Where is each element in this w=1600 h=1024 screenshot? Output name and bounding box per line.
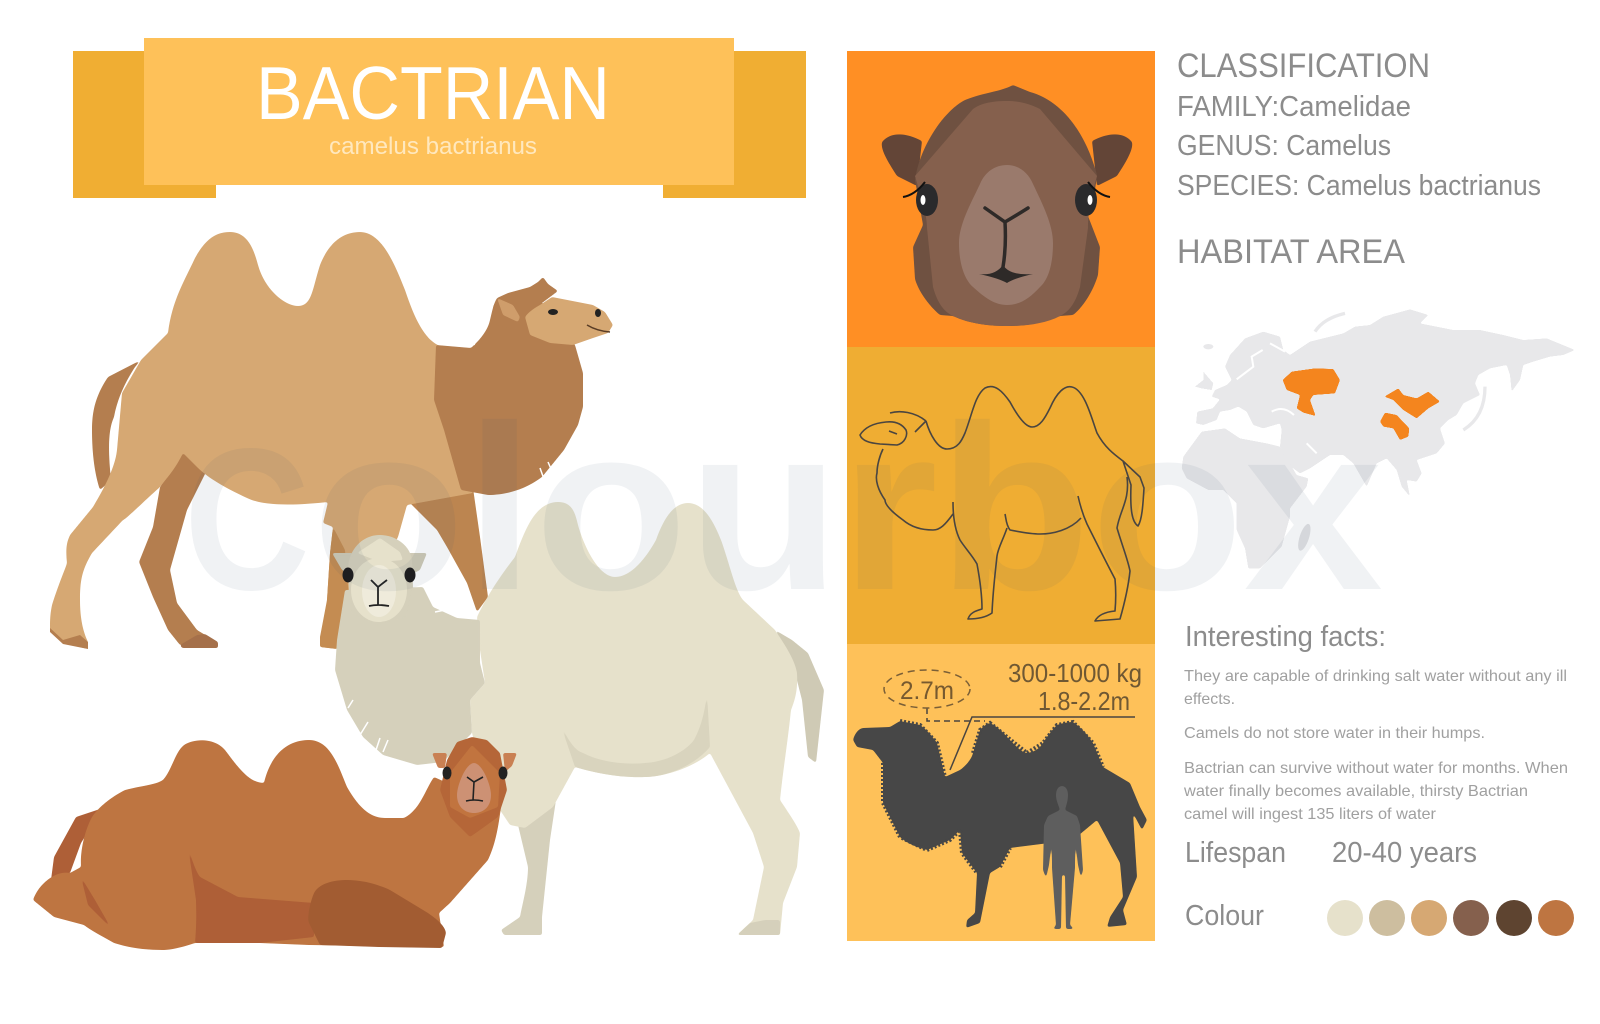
icon: camel line drawing bbox=[860, 387, 1144, 621]
title: BACTRIAN bbox=[256, 51, 610, 135]
colour legend bbox=[1185, 900, 1574, 936]
fact 3 bbox=[1183, 760, 1568, 823]
fact 3: camel will ingest 135 liters of water bbox=[1184, 806, 1437, 823]
fact 2: Camels do not store water in their humps. bbox=[1184, 725, 1485, 742]
label: total height: 2.7m bbox=[900, 677, 954, 705]
classification text: FAMILY:Camelidae bbox=[1177, 91, 1411, 123]
head bbox=[493, 277, 613, 345]
icon: human silhouette bbox=[1043, 786, 1083, 929]
classification text bbox=[1177, 47, 1541, 202]
fact 1 bbox=[1184, 668, 1567, 708]
icon: camel face bbox=[882, 85, 1132, 326]
facts heading: Interesting facts: bbox=[1185, 621, 1386, 653]
height marker bbox=[884, 670, 1135, 770]
habitat: mongolia range bbox=[1384, 388, 1440, 418]
fact 3: water finally becomes available, thirsty Bactrian bbox=[1183, 783, 1528, 800]
classification text: SPECIES: Camelus bactrianus bbox=[1177, 170, 1541, 202]
habitat: china range bbox=[1380, 413, 1409, 440]
title banner bbox=[73, 38, 806, 198]
classification text: CLASSIFICATION bbox=[1177, 47, 1430, 85]
watermark: C bbox=[184, 406, 310, 632]
illustration: resting brown camel bbox=[33, 737, 517, 950]
subtitle: camelus bactrianus bbox=[329, 133, 537, 160]
fact 3: Bactrian can survive without water for months. When bbox=[1184, 760, 1568, 777]
illustration: standing tan camel bbox=[50, 232, 613, 649]
illustration: cream camel bbox=[332, 502, 824, 935]
colour legend: Colour bbox=[1185, 900, 1264, 932]
panel: outline bbox=[847, 347, 1155, 644]
facts block bbox=[1183, 621, 1568, 823]
map: habitat area bbox=[1182, 309, 1575, 568]
habitat heading: HABITAT AREA bbox=[1177, 233, 1405, 271]
watermark: olourbox bbox=[312, 376, 1383, 639]
fact 1: They are capable of drinking salt water without any ill bbox=[1184, 668, 1567, 685]
lifespan: Lifespan bbox=[1185, 837, 1286, 869]
fact 1: effects. bbox=[1184, 691, 1235, 708]
head bbox=[432, 737, 517, 837]
label: weight: 300-1000 kg bbox=[1008, 658, 1142, 688]
panel: face bbox=[847, 51, 1155, 347]
habitat: west range bbox=[1283, 368, 1340, 416]
label: shoulder height: 1.8-2.2m bbox=[1038, 686, 1130, 716]
panel: size comparison bbox=[847, 644, 1155, 941]
lifespan bbox=[1185, 837, 1477, 869]
classification text: GENUS: Camelus bbox=[1177, 130, 1391, 162]
head bbox=[332, 535, 427, 626]
icon: camel silhouette bbox=[853, 721, 1147, 928]
lifespan: 20-40 years bbox=[1332, 837, 1477, 869]
